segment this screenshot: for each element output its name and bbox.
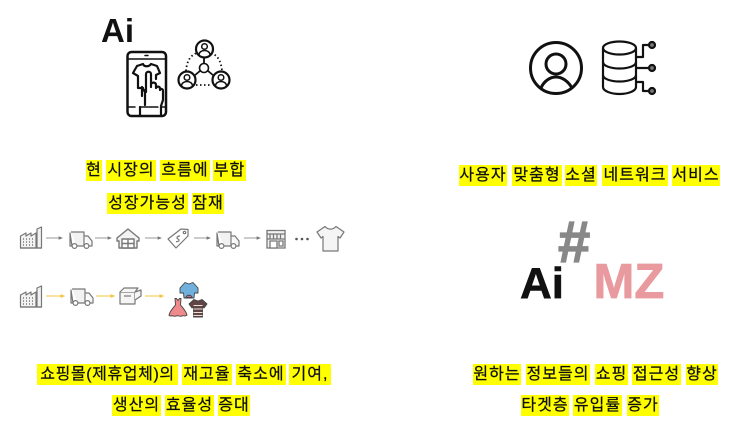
label: MZ: MZ <box>594 255 664 309</box>
caption: personalized social network service: 서비스 <box>672 167 720 184</box>
icon: warehouse <box>117 229 139 248</box>
caption: inventory reduction: 증대 <box>218 397 250 414</box>
caption: inventory reduction: 효율성 <box>166 397 213 414</box>
icon: colourful clothes <box>169 282 207 317</box>
caption: market trend: 부합 <box>214 162 245 179</box>
caption: market trend: 현 <box>86 162 102 179</box>
icon: ellipsis dots <box>295 238 309 240</box>
title: Ai top left: Ai <box>101 12 134 49</box>
caption: inventory reduction: 기여, <box>292 366 328 383</box>
hashtag symbol: # <box>558 210 590 275</box>
caption: personalized social network service: 네트워크 <box>604 167 666 184</box>
caption: inventory reduction: 생산의 <box>113 397 160 414</box>
caption: shopping access and target inflow: 접근성 <box>633 366 680 383</box>
icon: smartphone with shirt and tapping hand <box>128 52 166 116</box>
caption: inventory reduction: 축소에 <box>237 366 285 383</box>
caption: shopping access and target inflow: 향상 <box>686 366 718 383</box>
caption: shopping access and target inflow: 정보들의 <box>527 366 589 383</box>
caption: market trend: 흐름에 <box>161 162 209 179</box>
caption: market trend: 성장가능성 <box>108 195 187 212</box>
icon: user profile circle <box>530 42 582 94</box>
label: Ai: Ai <box>520 259 564 308</box>
caption: personalized social network service: 소셜 <box>565 167 597 184</box>
caption: shopping access and target inflow: 쇼핑 <box>596 366 627 383</box>
icon: connected people network <box>178 40 230 88</box>
caption: inventory reduction: 쇼핑몰(제휴업체)의 <box>40 366 175 383</box>
icon: t-shirt <box>317 226 344 251</box>
icon: parcel box <box>120 288 141 304</box>
caption: shopping access and target inflow: 증가 <box>627 397 659 414</box>
caption: personalized social network service: 사용자 <box>459 167 507 184</box>
icon: store <box>267 230 285 248</box>
chart: on-demand supply chain flow <box>20 282 207 317</box>
chart: conventional supply chain flow <box>20 226 344 251</box>
icon: database with connectors <box>603 42 655 94</box>
caption: market trend: 시장의 <box>107 162 155 179</box>
caption: shopping access and target inflow: 타겟층 <box>521 397 569 414</box>
icon: price tag <box>168 229 188 248</box>
caption: market trend: 잠재 <box>192 195 224 212</box>
caption: personalized social network service: 맞춤형 <box>513 167 561 184</box>
caption: inventory reduction: 재고율 <box>183 366 231 383</box>
caption: shopping access and target inflow: 유입률 <box>574 397 621 414</box>
caption: shopping access and target inflow: 원하는 <box>473 366 521 383</box>
